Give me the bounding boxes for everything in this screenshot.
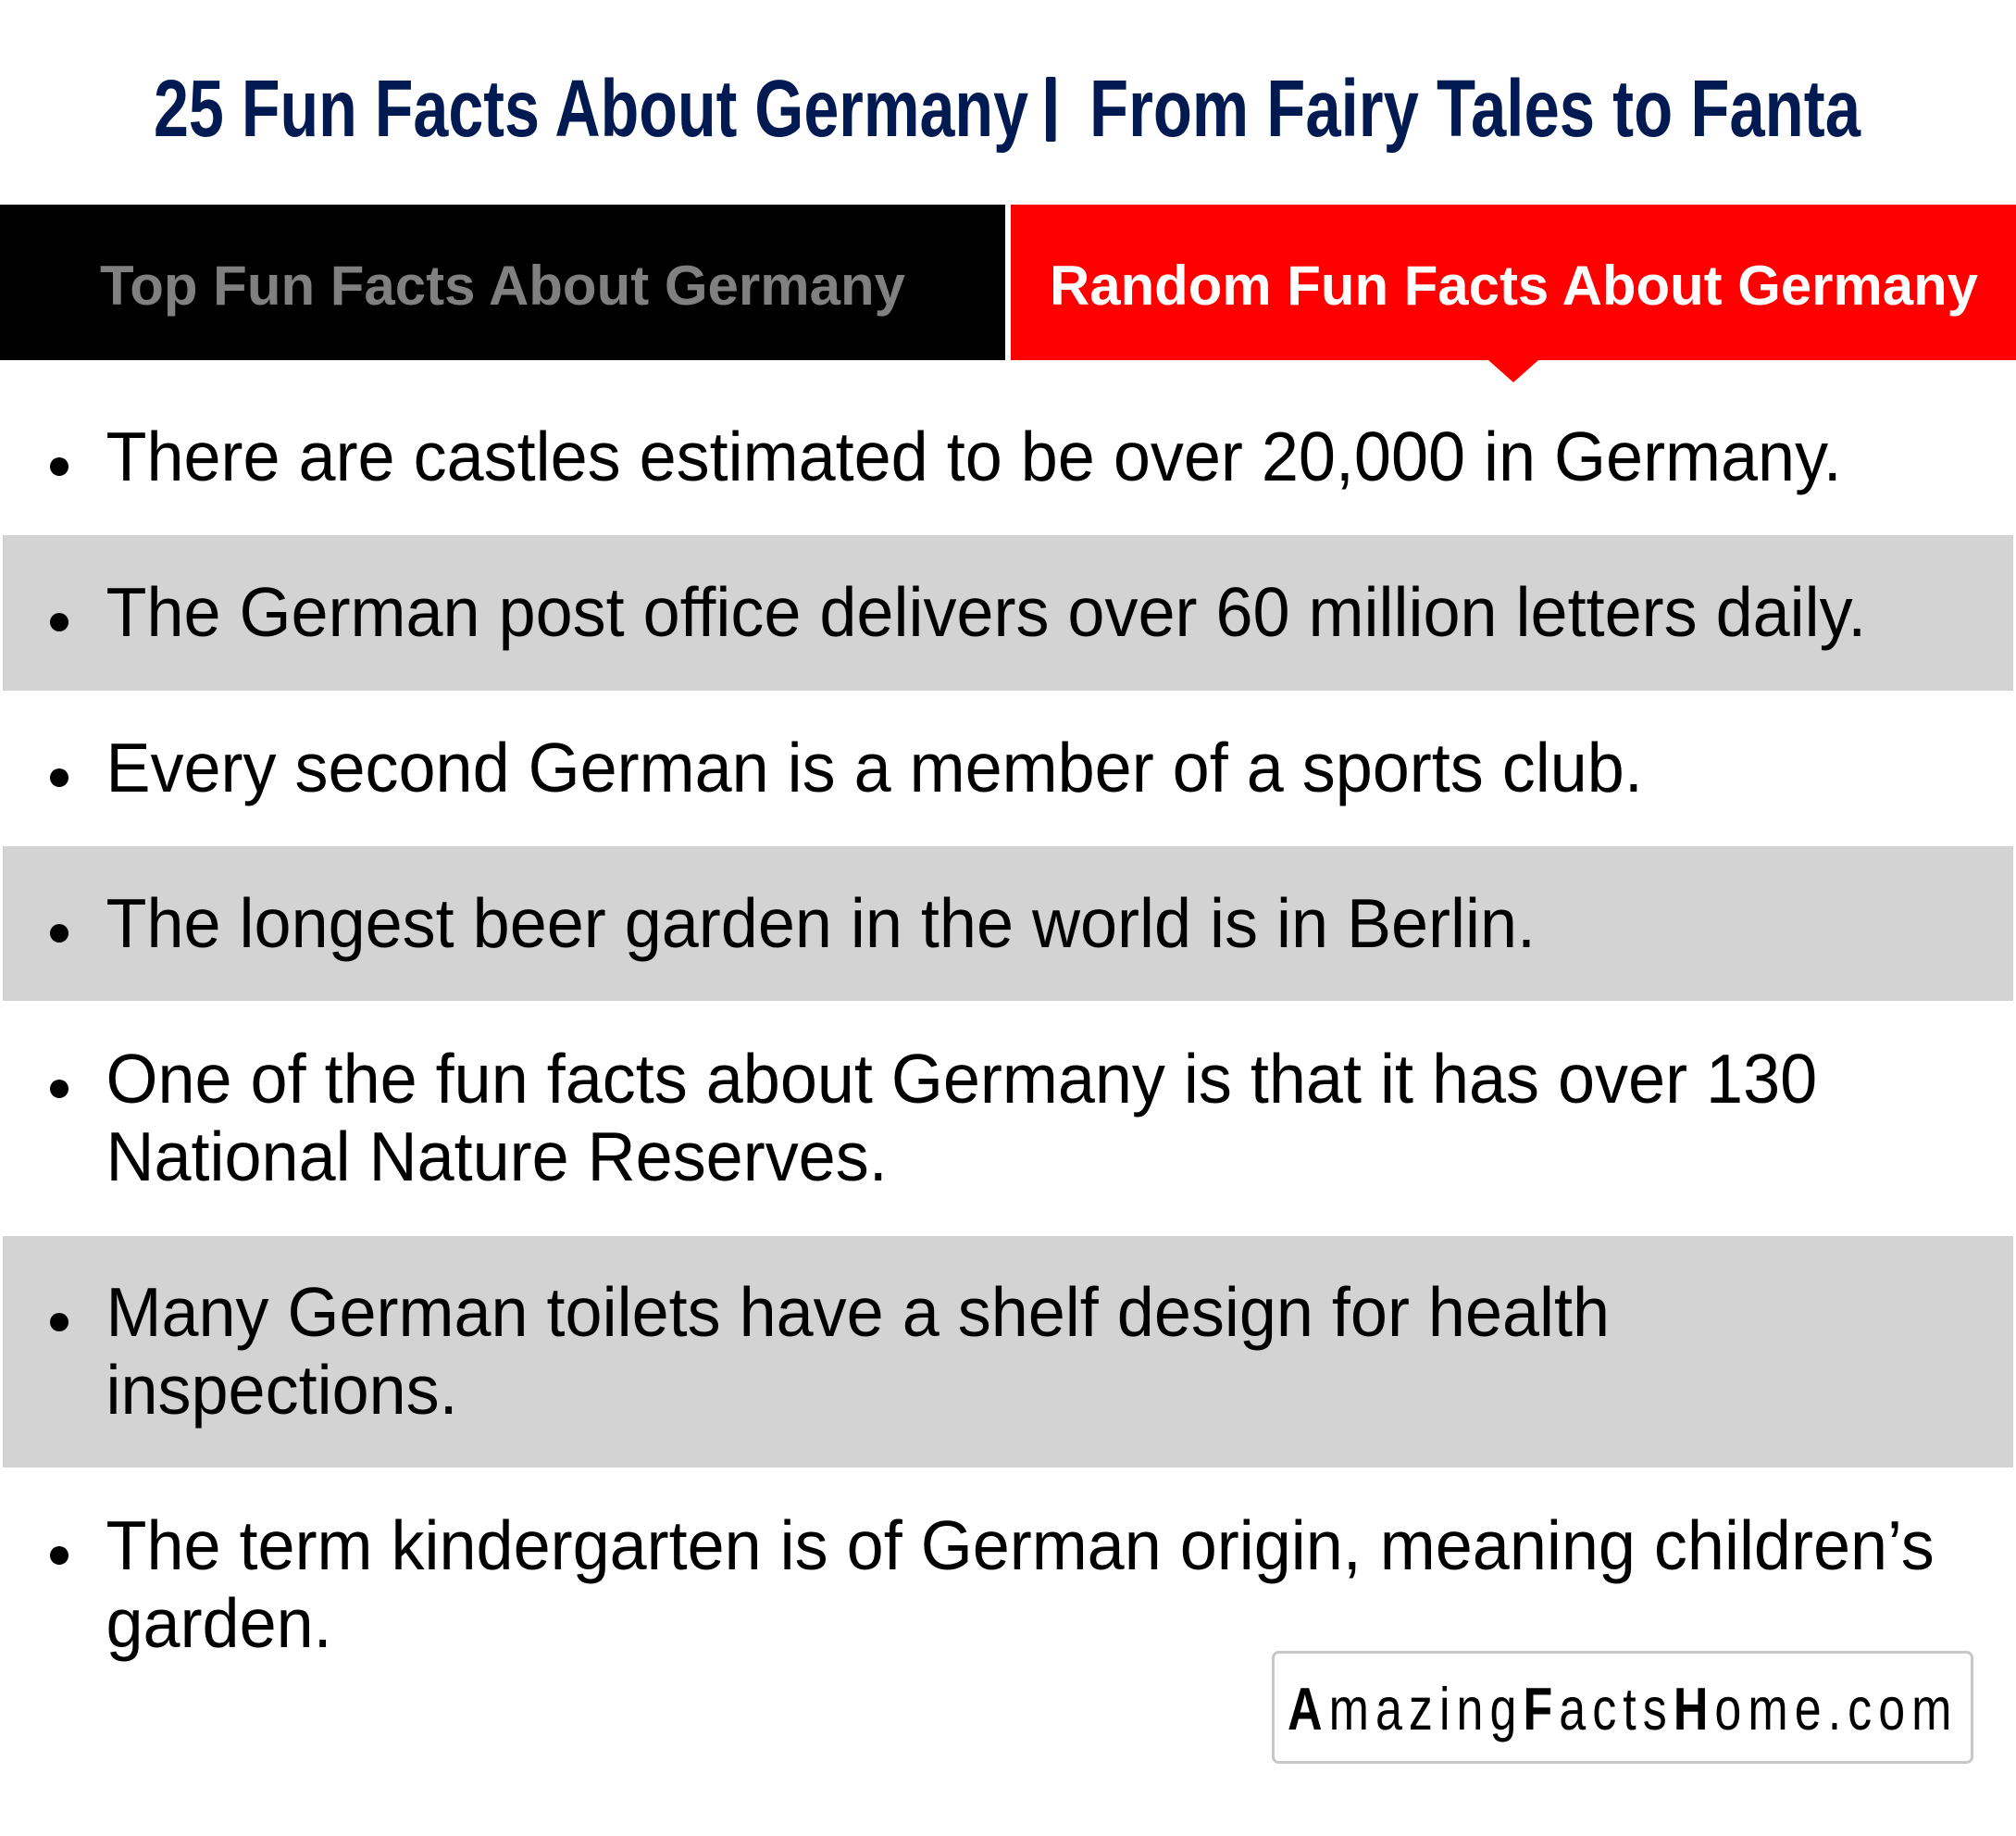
- fact row 4: The longest beer garden in the world is in Berlin.: [106, 884, 1536, 962]
- title: 25 Fun Facts About Germany: [154, 64, 1028, 154]
- fact row 5: One of the fun facts about Germany is that it has over 130: [106, 1040, 1817, 1118]
- fact row 2: The German post office delivers over 60 million letters daily.: [106, 573, 1866, 651]
- watermark badge: AmazingFactsHome.com: [1288, 1677, 1959, 1742]
- fact row 6: Many German toilets have a shelf design for health: [106, 1273, 1610, 1351]
- tab: random fun facts (active): [1011, 205, 2016, 382]
- fact row 5: [50, 1040, 1817, 1195]
- fact row 6: inspections.: [106, 1351, 458, 1429]
- tab: random fun facts (active): Random Fun Facts About Germany: [1050, 255, 1979, 317]
- fact row 2: [3, 535, 2013, 691]
- watermark badge: [1274, 1652, 1972, 1763]
- fact row 3: Every second German is a member of a sports club.: [106, 729, 1643, 806]
- fact row 7: garden.: [106, 1584, 332, 1662]
- tab: top fun facts: Top Fun Facts About Germany: [100, 255, 906, 317]
- fact row 4: [3, 846, 2013, 1001]
- title: [154, 64, 1860, 154]
- tab: top fun facts: [0, 205, 1005, 360]
- fact row 1: There are castles estimated to be over 20,000 in Germany.: [106, 418, 1842, 495]
- fact row 5: National Nature Reserves.: [106, 1118, 888, 1195]
- fact row 7: [50, 1506, 1935, 1662]
- fact row 6: [3, 1236, 2013, 1468]
- fact row 7: The term kindergarten is of German origin, meaning children’s: [106, 1506, 1935, 1584]
